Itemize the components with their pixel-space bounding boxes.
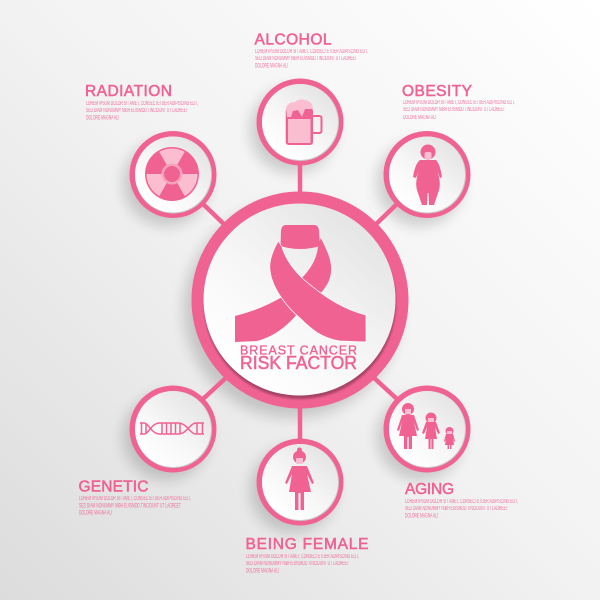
text block: radiation: SED DIAM NONUMMY NIBH EUISMOD TINCIDUNT UT LAOREET xyxy=(86,108,188,114)
text block: alcohol: DOLORE MAGNA ALI xyxy=(255,64,288,70)
icon: pink ribbon xyxy=(235,225,366,342)
central panel: breast cancer risk factor xyxy=(192,192,408,408)
central title: BREAST CANCER xyxy=(240,343,357,357)
text block: aging: LOREM IPSUM DOLOR SIT AMET, CONSECTETUER ADIPISCING ELIT, xyxy=(405,499,518,505)
text block: genetic: DOLORE MAGNA ALI xyxy=(79,510,112,516)
text block: aging: SED DIAM NONUMMY NIBH EUISMOD TINCIDUNT UT LAOREET xyxy=(405,506,508,512)
central title: RISK FACTOR xyxy=(240,353,357,373)
text block: genetic: GENETIC xyxy=(78,478,148,496)
text block: aging xyxy=(405,481,518,520)
text block: being female xyxy=(246,536,368,574)
text block: being female: BEING FEMALE xyxy=(246,536,368,553)
text block: alcohol: SED DIAM NONUMMY NIBH EUISMOD TINCIDUNT UT LAOREET xyxy=(255,56,357,62)
text block: radiation xyxy=(85,83,198,122)
text block: being female: LOREM IPSUM DOLOR SIT AMET, CONSECTETUER ADIPISCING ELIT, xyxy=(246,554,359,560)
icon: three generations of women xyxy=(397,403,455,449)
text block: alcohol: ALCOHOL xyxy=(254,32,332,48)
text block: obesity: LOREM IPSUM DOLOR SIT AMET, CONSECTETUER ADIPISCING ELIT, xyxy=(403,100,515,106)
icon: beer mug xyxy=(286,99,322,145)
text block: alcohol: LOREM IPSUM DOLOR SIT AMET, CONSECTETUER ADIPISCING ELIT, xyxy=(255,49,368,55)
text block: obesity: OBESITY xyxy=(402,83,472,100)
shadows xyxy=(123,87,463,533)
text block: genetic xyxy=(78,478,191,516)
text block: being female: SED DIAM NONUMMY NIBH EUISMOD TINCIDUNT UT LAOREET xyxy=(246,561,349,567)
panel: radiation circle xyxy=(130,131,216,218)
panel: genetic circle xyxy=(130,386,216,472)
panel: aging circle xyxy=(384,386,470,472)
text block: alcohol xyxy=(254,32,368,70)
central title xyxy=(240,343,357,373)
panel: being female circle xyxy=(256,438,344,526)
icon: obese woman xyxy=(413,144,442,205)
text block: obesity: SED DIAM NONUMMY NIBH EUISMOD TINCIDUNT UT LAOREET xyxy=(403,107,505,113)
text block: radiation: LOREM IPSUM DOLOR SIT AMET, CONSECTETUER ADIPISCING ELIT, xyxy=(86,101,198,107)
icon: woman xyxy=(285,448,314,510)
text block: aging: AGING xyxy=(405,481,454,498)
text block: aging: DOLORE MAGNA ALI xyxy=(405,514,438,520)
panel: obesity circle xyxy=(384,131,470,218)
panel: alcohol circle xyxy=(256,78,344,166)
text block: being female: DOLORE MAGNA ALI xyxy=(246,568,279,574)
text block: obesity xyxy=(402,83,515,121)
text block: genetic: SED DIAM NONUMMY NIBH EUISMOD TINCIDUNT UT LAOREET xyxy=(79,504,181,510)
text block: obesity: DOLORE MAGNA ALI xyxy=(403,115,436,121)
icon: DNA helix xyxy=(140,423,204,434)
text block: genetic: LOREM IPSUM DOLOR SIT AMET, CONSECTETUER ADIPISCING ELIT, xyxy=(79,496,191,502)
text block: radiation: RADIATION xyxy=(85,83,172,100)
text block: radiation: DOLORE MAGNA ALI xyxy=(86,116,119,122)
connector lines xyxy=(203,160,397,445)
icon: radiation symbol xyxy=(145,147,199,201)
